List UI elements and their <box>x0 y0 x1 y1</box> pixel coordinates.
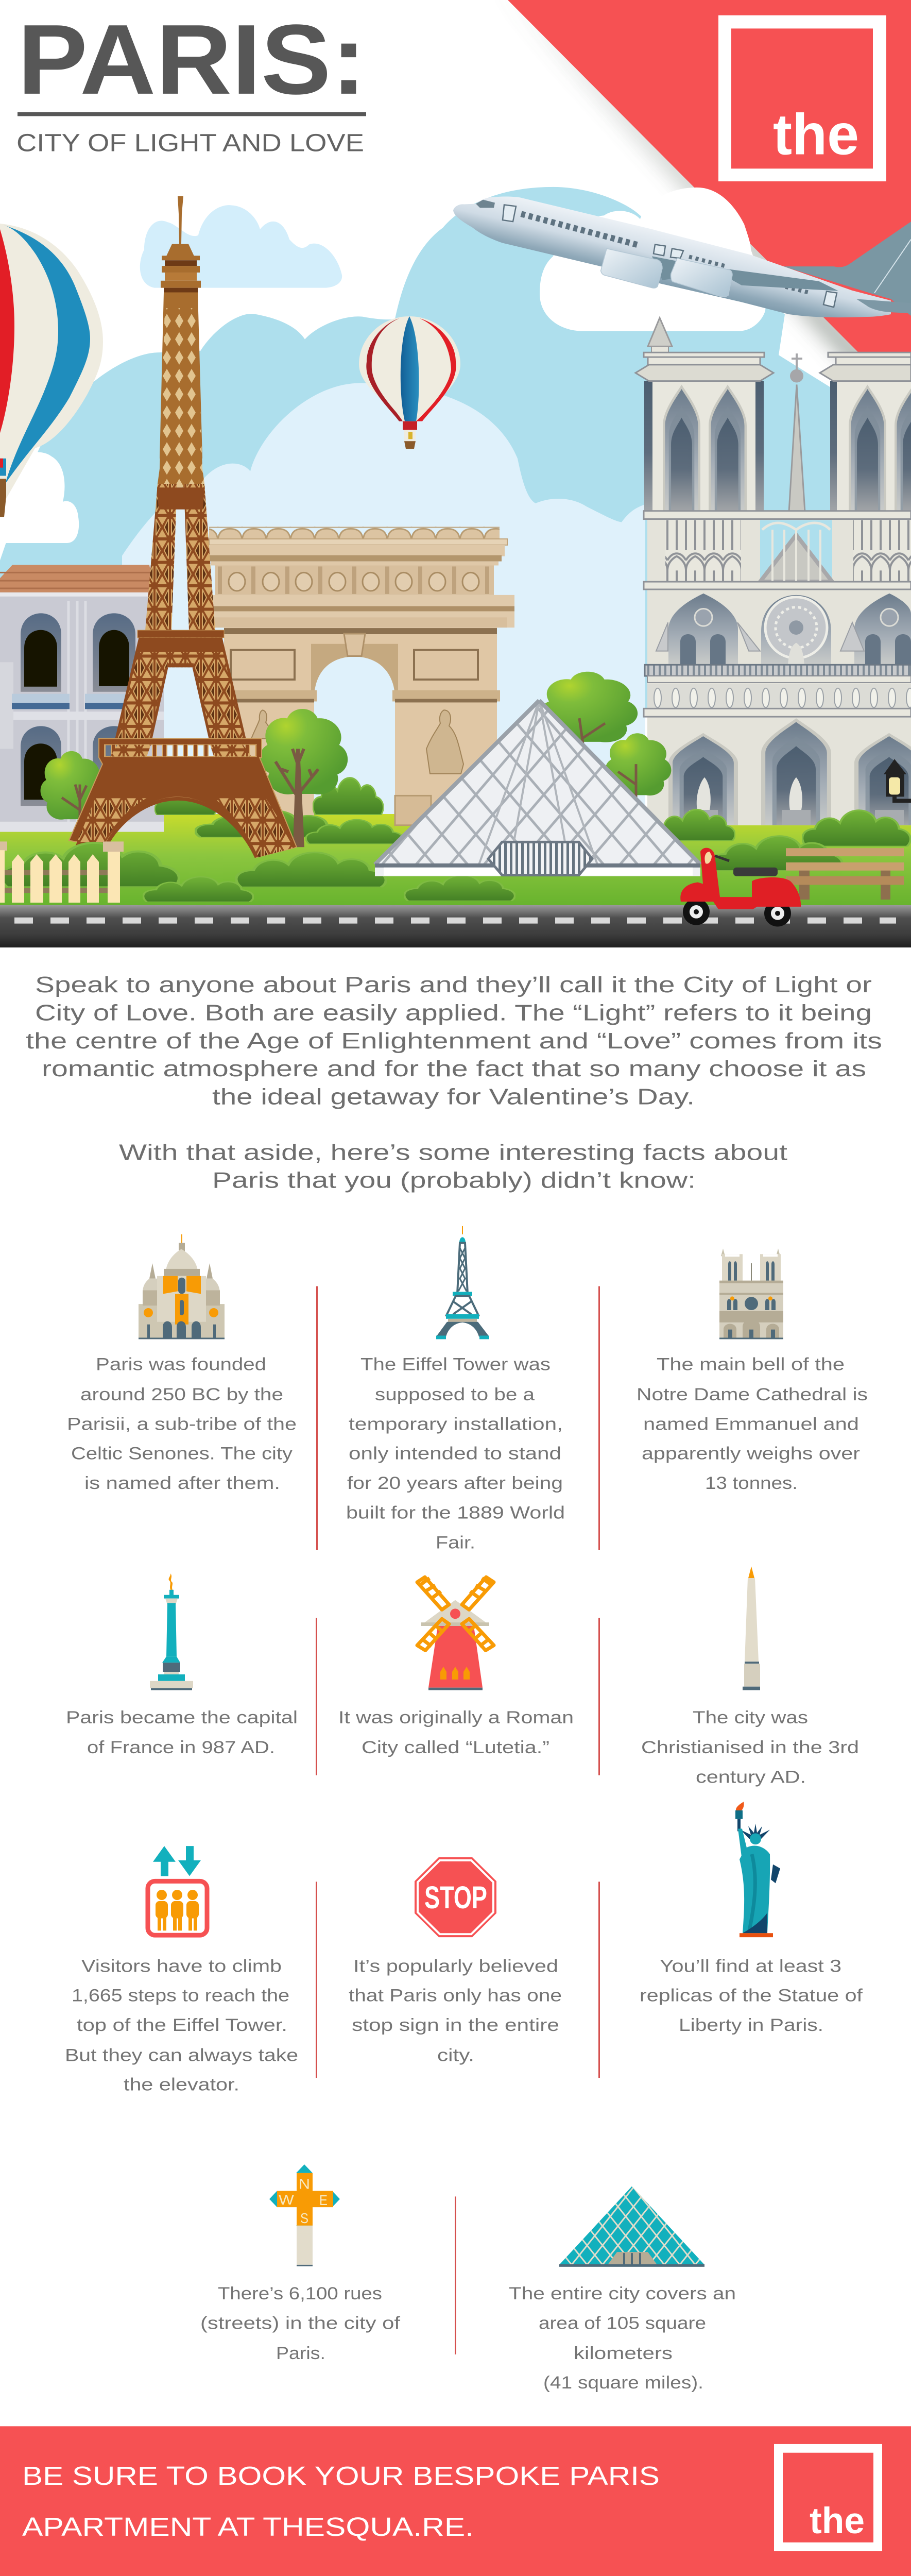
elevator people <box>156 1890 199 1930</box>
hero illustration <box>0 0 911 947</box>
second platform <box>137 630 224 638</box>
row 1 dividers <box>316 1286 600 1550</box>
fact 7 icon: elevator <box>148 1846 207 1935</box>
building windows <box>21 613 135 806</box>
Arc de Triomphe <box>209 527 514 825</box>
fact 1 text: Parisii, a sub-tribe of the <box>67 1414 297 1434</box>
logo top: the <box>773 102 859 167</box>
fuselage <box>453 197 891 317</box>
fact 7 text: top of the Eiffel Tower. <box>77 2015 287 2035</box>
intro lead-in: With that aside, here’s some interesting facts about <box>119 1140 787 1165</box>
airplane <box>453 197 911 317</box>
intro lead-in <box>119 1140 787 1193</box>
fact 10 icon: street compass sign <box>269 2164 340 2266</box>
pale cloud behind tower <box>140 205 342 288</box>
pyramid entrance <box>488 842 592 875</box>
upper lattice shaft <box>157 308 205 487</box>
fact 8 icon: stop sign: STOP <box>424 1880 487 1916</box>
fact 8 icon: stop sign <box>415 1857 496 1937</box>
rose window tier <box>656 594 911 665</box>
footer call to action: BE SURE TO BOOK YOUR BESPOKE PARIS <box>22 2461 660 2490</box>
footer logo: the <box>810 2500 865 2541</box>
fact 7 text: 1,665 steps to reach the <box>72 1986 289 2006</box>
upper tracery gallery <box>665 520 911 582</box>
fact 6 text <box>641 1707 859 1787</box>
fact 6 icon: obelisk <box>743 1566 760 1690</box>
fact 10 text: Paris. <box>276 2343 325 2363</box>
fact 6 text: The city was <box>693 1707 808 1727</box>
fact 5 icon: Moulin Rouge windmill <box>417 1577 494 1690</box>
fact 1 text: Paris was founded <box>96 1354 266 1375</box>
tail stabilizer <box>856 299 911 313</box>
white cloud left <box>0 452 79 543</box>
footer logo <box>774 2444 882 2551</box>
tower finial <box>648 318 672 352</box>
fact 8 text: city. <box>437 2045 474 2065</box>
fact 9 icon: Statue of Liberty <box>735 1802 780 1937</box>
small balloon <box>359 316 460 449</box>
fact 11 text: The entire city covers an <box>509 2283 736 2303</box>
fact 9 text: You’ll find at least 3 <box>660 1956 841 1976</box>
footer call to action: APARTMENT AT THESQUA.RE. <box>22 2512 474 2541</box>
doors <box>503 205 837 307</box>
logo top <box>718 15 886 181</box>
left building <box>0 565 164 832</box>
fact 2 text <box>346 1354 565 1553</box>
fact 11 text <box>509 2283 736 2393</box>
glass pyramid <box>375 701 700 876</box>
fact 10 icon: street compass sign: W <box>279 2192 295 2208</box>
tree left <box>41 751 104 836</box>
robe <box>740 1845 770 1933</box>
intro paragraph: the centre of the Age of Enlightenment and “Love” comes from its <box>26 1028 882 1054</box>
lighter sky centre <box>122 383 645 896</box>
fact 2 text: The Eiffel Tower was <box>360 1354 551 1375</box>
fact 10 text: (streets) in the city of <box>200 2313 400 2333</box>
fact 3 icon: Notre Dame <box>719 1248 783 1339</box>
fact 6 text: Christianised in the 3rd <box>641 1737 859 1757</box>
intro lead-in: Paris that you (probably) didn’t know: <box>212 1168 696 1193</box>
trees behind pyramid <box>540 672 671 800</box>
heading PARIS: PARIS: <box>18 4 366 115</box>
red corner triangle shadow <box>497 0 911 510</box>
fact 1 icon: Sacre Coeur <box>139 1234 225 1339</box>
fact 5 text <box>338 1707 574 1757</box>
footer call to action <box>22 2461 660 2541</box>
middle legs <box>116 638 245 739</box>
fact 4 icon: July Column <box>150 1573 193 1690</box>
Notre Dame cathedral <box>635 318 911 825</box>
tail fin <box>783 222 911 316</box>
cockpit window <box>476 200 495 208</box>
fact 8 text: stop sign in the entire <box>352 2015 559 2035</box>
road <box>0 905 911 947</box>
white cloud behind plane <box>540 188 766 331</box>
fence <box>0 841 124 903</box>
fact 2 icon: Eiffel Tower <box>436 1226 489 1339</box>
footer banner <box>0 2426 911 2576</box>
gallery of kings <box>647 684 911 708</box>
fact 1 text: around 250 BC by the <box>80 1384 283 1404</box>
fact 7 text: But they can always take <box>65 2045 298 2065</box>
bushes mid <box>195 810 843 871</box>
engines <box>601 248 732 297</box>
building balconies <box>12 694 143 709</box>
fact 3 text: apparently weighs over <box>642 1444 860 1464</box>
fact 6 text: century AD. <box>696 1767 806 1787</box>
subtitle: CITY OF LIGHT AND LOVE <box>16 129 364 157</box>
fact 5 text: City called “Lutetia.” <box>362 1737 549 1757</box>
fact 4 text: Paris became the capital <box>66 1707 298 1727</box>
fact 1 text: Celtic Senones. The city <box>71 1444 293 1464</box>
fact 10 text <box>200 2283 400 2363</box>
fact 9 text: Liberty in Paris. <box>679 2015 823 2035</box>
fact 2 text: Fair. <box>436 1533 475 1553</box>
elevator arrows <box>153 1846 201 1876</box>
fact 2 text: temporary installation, <box>349 1414 563 1434</box>
fact 3 text: Notre Dame Cathedral is <box>637 1384 868 1404</box>
fact 7 text <box>65 1956 298 2095</box>
fact 7 text: the elevator. <box>124 2075 239 2095</box>
relief sculpture <box>426 710 463 774</box>
balustrade <box>645 665 911 676</box>
fact 11 icon: Louvre pyramid <box>559 2187 704 2267</box>
fact 2 text: for 20 years after being <box>347 1473 563 1493</box>
fact 1 text <box>67 1354 297 1493</box>
crown <box>741 1824 770 1839</box>
red corner triangle <box>508 0 911 402</box>
bushes behind <box>155 778 910 846</box>
fact 10 text: There’s 6,100 rues <box>218 2283 382 2303</box>
fact 3 text: named Emmanuel and <box>643 1414 859 1434</box>
fact 8 text <box>349 1956 562 2065</box>
facade lower walls <box>647 519 911 825</box>
fact 8 text: It’s popularly believed <box>353 1956 558 1976</box>
grass <box>0 814 911 905</box>
fact 5 text: It was originally a Roman <box>338 1707 574 1727</box>
park bench <box>786 848 904 900</box>
red scooter <box>680 848 801 926</box>
intro paragraph: City of Love. Both are easily applied. The “Light” refers to it being <box>35 1001 872 1025</box>
fact 4 text: of France in 987 AD. <box>87 1737 275 1757</box>
fact 2 text: built for the 1889 World <box>346 1503 565 1522</box>
first platform <box>69 739 297 857</box>
fact 3 text: The main bell of the <box>657 1354 845 1375</box>
upper legs <box>145 484 215 631</box>
spire <box>178 196 183 244</box>
row 4 divider <box>455 2196 456 2354</box>
row 2 dividers <box>316 1618 600 1775</box>
fact 7 text: Visitors have to climb <box>81 1956 282 1976</box>
fact 10 icon: street compass sign: S <box>300 2210 308 2226</box>
fact 2 text: supposed to be a <box>375 1384 535 1404</box>
title <box>16 4 366 157</box>
relief sculpture left <box>251 710 273 739</box>
fact 9 text <box>640 1956 863 2035</box>
fact 4 text <box>66 1707 298 1757</box>
fact 10 icon: street compass sign: E <box>319 2192 328 2208</box>
fact 1 text: is named after them. <box>84 1473 280 1493</box>
title rule <box>18 112 366 116</box>
Eiffel Tower large <box>69 196 297 857</box>
central spire <box>789 353 805 512</box>
sky blue cloud mass <box>0 187 911 713</box>
fact 8 text: that Paris only has one <box>349 1986 562 2006</box>
intro paragraph: the ideal getaway for Valentine’s Day. <box>212 1084 695 1110</box>
fact 9 text: replicas of the Statue of <box>640 1986 863 2006</box>
lower legs and arch <box>75 797 296 857</box>
fact 3 text <box>637 1354 868 1493</box>
road dashes <box>14 918 896 924</box>
wing <box>727 269 838 291</box>
right tower <box>820 352 911 512</box>
fact 3 text: 13 tonnes. <box>705 1473 798 1493</box>
large balloon left <box>0 224 103 517</box>
shadow hem <box>743 1913 767 1933</box>
tree centre <box>260 709 348 847</box>
fact 11 text: kilometers <box>574 2343 673 2363</box>
fact 2 text: only intended to stand <box>349 1444 561 1464</box>
fact 11 text: area of 105 square <box>539 2313 706 2333</box>
torch <box>736 1802 744 1810</box>
intro paragraph <box>26 972 882 1110</box>
three portals <box>668 718 911 825</box>
row 3 dividers <box>316 1882 600 2078</box>
front bushes <box>1 843 515 902</box>
intro paragraph: romantic atmosphere and for the fact that so many choose it as <box>42 1056 866 1081</box>
frieze medallions <box>229 572 479 591</box>
fact 11 text: (41 square miles). <box>543 2372 703 2393</box>
street lamp <box>884 759 911 801</box>
tablet <box>771 1865 780 1883</box>
top section <box>160 244 202 459</box>
passenger windows <box>521 214 640 246</box>
raised arm <box>738 1829 748 1857</box>
left tower <box>635 352 774 512</box>
intro paragraph: Speak to anyone about Paris and they’ll call it the City of Light or <box>35 972 872 997</box>
fact 10 icon: street compass sign: N <box>299 2176 310 2192</box>
